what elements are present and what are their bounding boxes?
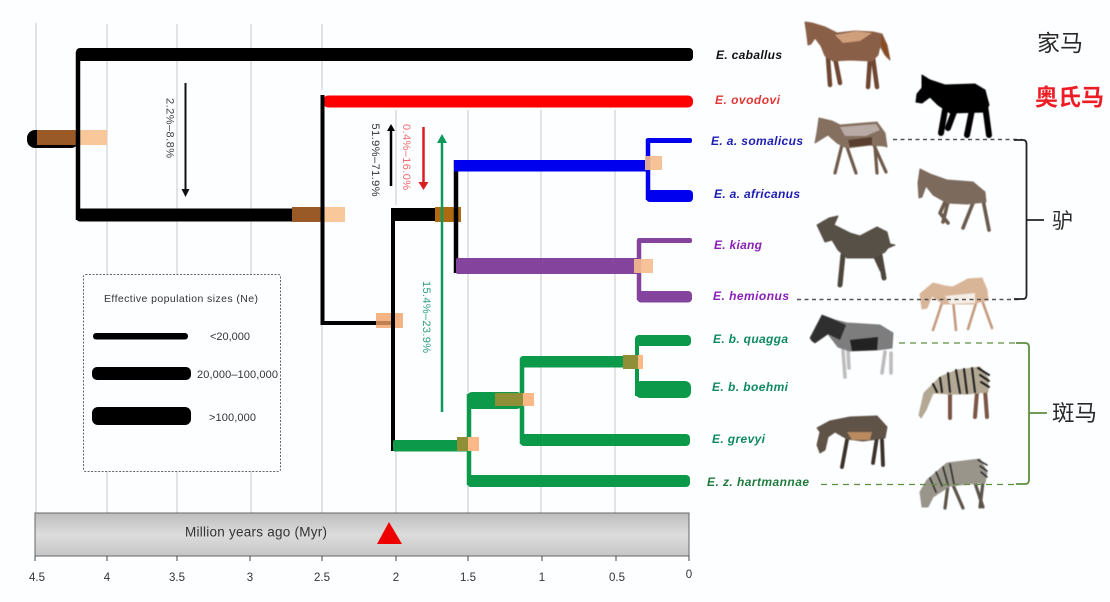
axis ticks and labels: 1.5	[460, 572, 476, 584]
animal: kiang	[817, 216, 895, 285]
animal: African wild ass	[918, 169, 989, 230]
gene flow arrow: red downward: 0.4%–16.0%	[400, 124, 412, 190]
legend thin bar	[93, 333, 188, 340]
axis ticks and labels: 0	[686, 569, 692, 581]
species labels: E. caballus	[716, 48, 782, 62]
horse and ass split branches	[76, 48, 693, 222]
axis ticks and labels: 3.5	[169, 572, 185, 584]
species labels: E. hemionus	[713, 289, 789, 303]
kiang and hemionus branches	[456, 238, 692, 302]
axis ticks and labels: 0.5	[609, 572, 625, 584]
animal: Boehm's zebra	[919, 367, 989, 418]
species labels: E. b. quagga	[713, 332, 788, 346]
species labels: E. a. africanus	[714, 187, 800, 201]
animal: Hartmann's zebra	[920, 459, 987, 508]
axis ticks and labels: 4.5	[29, 572, 45, 584]
legend: effective population sizes	[84, 274, 280, 472]
animal: domestic horse	[805, 22, 890, 87]
ass-zebra stem	[322, 95, 461, 451]
axis ticks and labels: 2.5	[314, 572, 330, 584]
animal: onager	[920, 278, 992, 330]
species labels	[707, 48, 809, 489]
gene flow arrow: green upward: 15.4%–23.9%	[420, 281, 432, 353]
zebra bracket	[821, 343, 1047, 484]
species labels: E. ovodovi	[715, 93, 781, 107]
legend medium bar	[92, 367, 191, 380]
gene flow arrow: horse to ass lineage	[164, 83, 190, 197]
species labels: E. a. somalicus	[711, 134, 803, 148]
species labels: E. kiang	[714, 238, 763, 252]
gene flow arrow: horse to ass lineage: 2.2%–8.8%	[164, 98, 176, 158]
legend title: Effective population sizes (Ne)	[104, 293, 258, 305]
chinese label: zebra: 斑马	[1052, 401, 1097, 426]
gene flow arrow: black upward: 51.9%–71.9%	[369, 124, 381, 197]
species labels: E. grevyi	[712, 432, 766, 446]
chinese label: domestic horse: 家马	[1037, 30, 1083, 56]
axis ticks and labels: 2	[393, 572, 399, 584]
chinese label: ass: 驴	[1052, 210, 1073, 233]
ass bracket	[797, 140, 1044, 300]
legend labels: >100,000	[209, 412, 256, 424]
legend labels: 20,000–100,000	[197, 369, 278, 381]
root branch	[27, 130, 107, 148]
animal: black silhouette of E. ovodovi	[916, 75, 989, 135]
animal: Somali wild ass	[815, 118, 887, 173]
axis title: Million years ago (Myr)	[185, 524, 327, 540]
ovodovi branch	[323, 96, 693, 108]
somali and african ass branches	[454, 138, 693, 202]
species labels: E. z. hartmannae	[707, 475, 809, 489]
axis ticks and labels: 1	[539, 572, 545, 584]
axis ticks and labels: 3	[247, 572, 253, 584]
gene flow arrow: green upward	[420, 134, 447, 412]
chinese label: E. ovodovi: 奥氏马	[1035, 84, 1104, 110]
zebra branches	[393, 335, 691, 487]
legend thick bar	[92, 407, 191, 425]
axis ticks and labels	[29, 556, 692, 584]
gene flow arrow: black upward	[369, 124, 395, 197]
animal: quagga	[810, 315, 893, 377]
time axis band	[35, 513, 689, 556]
red triangle marker	[377, 522, 402, 544]
legend labels	[197, 331, 278, 424]
gene flow arrow: red downward	[400, 124, 428, 190]
species labels: E. b. boehmi	[712, 380, 789, 394]
animal: Grevy's zebra	[817, 416, 887, 467]
axis ticks and labels: 4	[104, 572, 111, 584]
legend labels: <20,000	[210, 331, 250, 343]
